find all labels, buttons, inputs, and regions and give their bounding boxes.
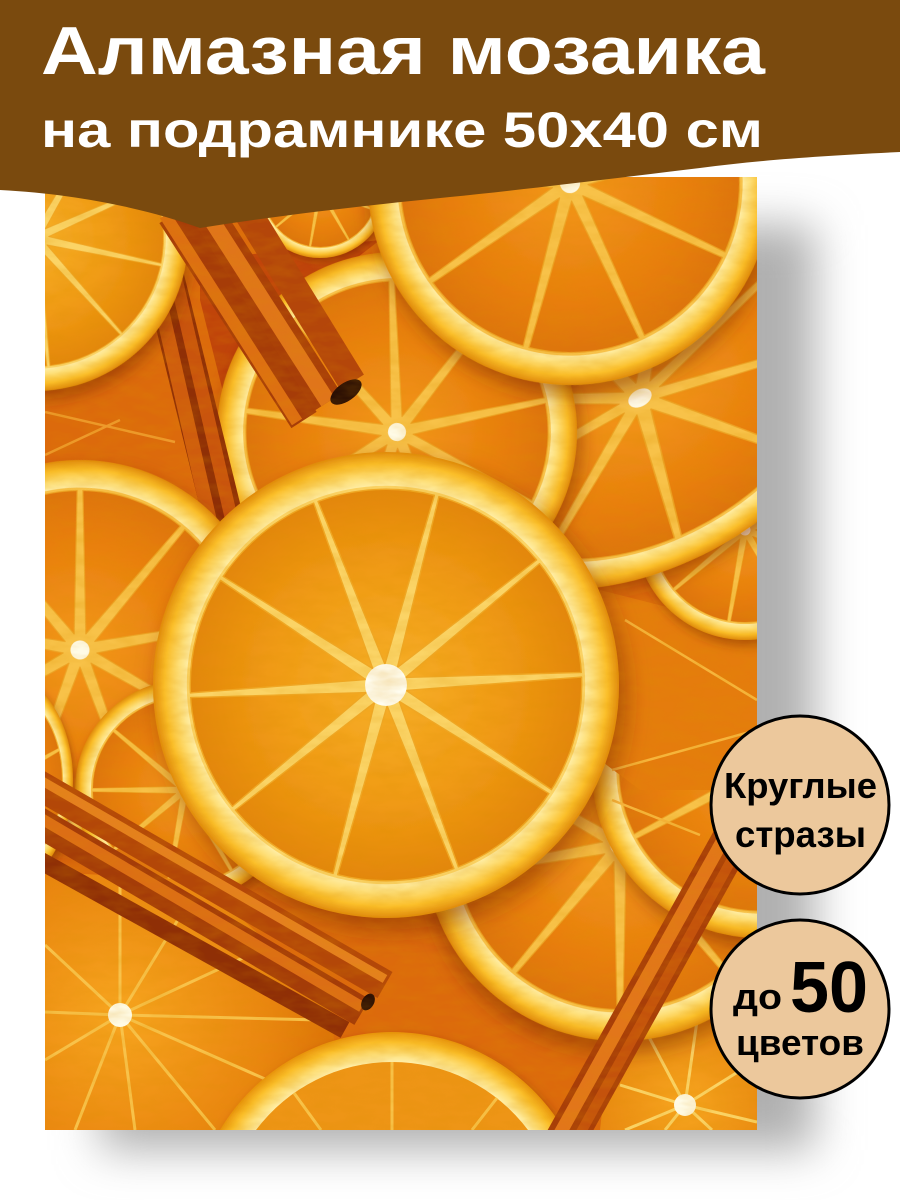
canvas shadow — [100, 225, 815, 1150]
cinnamon: bottom left sticks — [30, 774, 385, 1030]
badge: up to 50 colours: до — [733, 976, 782, 1017]
slice: top right — [362, 177, 757, 408]
slice: small top — [268, 206, 376, 264]
badge: round rhinestones: стразы — [735, 814, 866, 855]
slice: right small — [644, 522, 757, 652]
cinnamon: right stick — [558, 822, 748, 1143]
cinnamon: top sticks — [165, 200, 366, 422]
slice: top left — [45, 194, 194, 407]
painterly texture — [45, 177, 757, 1130]
slice: right lower — [590, 764, 757, 952]
slice: centre top — [216, 253, 593, 534]
slice: lower right — [428, 792, 738, 1064]
slice: left edge small — [45, 691, 80, 860]
badge: up to 50 colours: 50 — [790, 948, 868, 1028]
pulp patch: right lower upper area — [600, 590, 757, 835]
slice: bottom centre — [220, 1032, 564, 1130]
badge: round rhinestones — [711, 716, 889, 894]
shaded gap behind cinnamon — [200, 240, 380, 400]
background segment lines, left — [45, 412, 175, 455]
subtitle: на подрамнике 50х40 см — [41, 102, 763, 158]
slice: main central — [153, 452, 619, 918]
slice: right — [554, 270, 757, 600]
badge: up to 50 colours: цветов — [736, 1022, 864, 1063]
slice: bottom left — [45, 872, 335, 1130]
cinnamon: left stick — [156, 274, 240, 522]
slice: behind main, left — [74, 685, 261, 890]
badge: up to 50 colours — [711, 920, 889, 1098]
header banner — [0, 0, 900, 228]
badge: round rhinestones: Круглые — [724, 765, 877, 806]
slice: bottom right — [600, 1019, 757, 1130]
slice: left middle — [45, 460, 220, 860]
title: Алмазная мозаика — [41, 13, 766, 89]
canvas artwork: orange slices and cinnamon — [45, 177, 757, 1130]
